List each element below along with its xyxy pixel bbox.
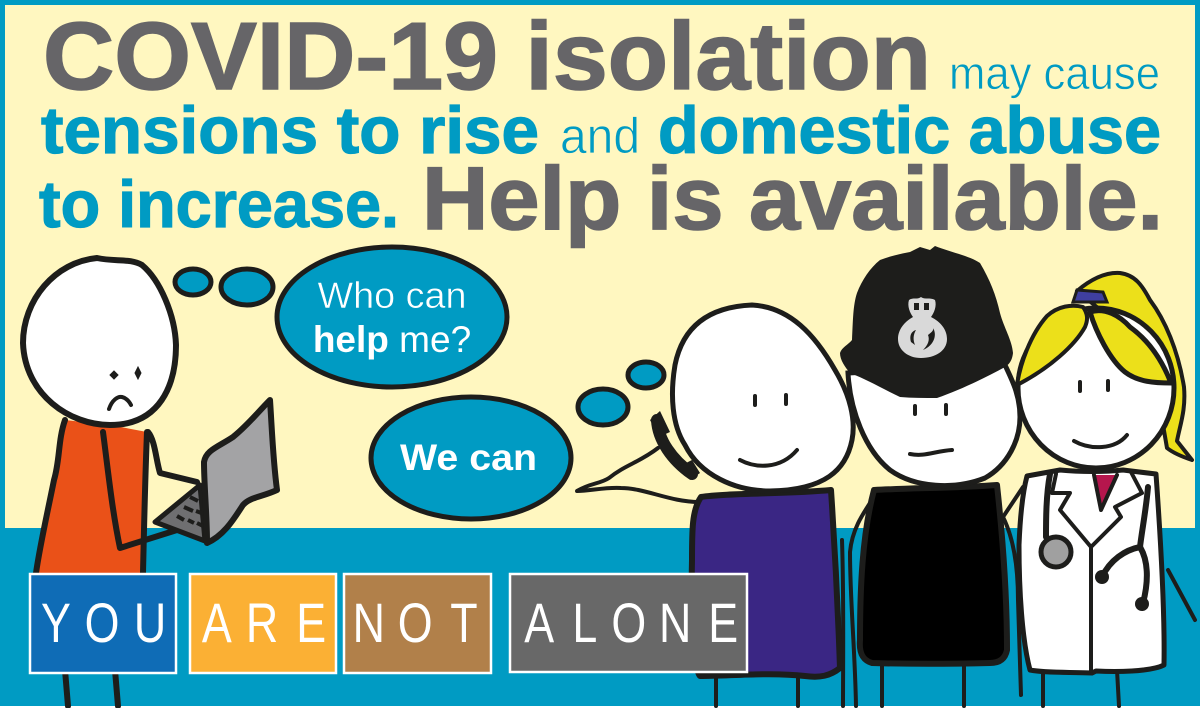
title: headline text: to increase.	[39, 167, 399, 241]
title: headline text	[39, 3, 1163, 248]
laptop keyboard	[155, 485, 205, 541]
lapels	[1052, 472, 1142, 671]
orange top	[35, 420, 147, 575]
word box: YOU	[30, 574, 176, 673]
stethoscope	[1046, 474, 1148, 603]
helmet	[840, 246, 1013, 398]
thought bubble: who can help me	[175, 247, 507, 387]
thought bubble: who can help me: Who can	[318, 275, 466, 316]
ponytail	[1077, 273, 1192, 460]
word box: ALONE: ALONE	[524, 591, 738, 654]
word box: ALONE	[510, 574, 747, 672]
head	[672, 305, 853, 491]
title: headline text: tensions to rise	[41, 93, 539, 167]
title: headline text: may cause	[949, 47, 1160, 99]
figure: worried person with laptop	[23, 258, 277, 706]
figure: doctor	[1003, 273, 1195, 706]
outstretched arm	[577, 448, 699, 502]
title: headline text: COVID-19 isolation	[43, 3, 931, 110]
smiling face	[740, 395, 797, 466]
head	[23, 258, 176, 425]
black uniform	[860, 485, 1007, 664]
figure: police officer	[840, 246, 1021, 706]
head	[848, 365, 1020, 486]
title: headline text: and	[560, 108, 640, 164]
word box: ARE	[190, 574, 336, 673]
sad face	[110, 367, 141, 379]
laptop screen	[204, 400, 277, 543]
title: headline text: domestic abuse	[658, 93, 1161, 167]
telephone handset	[657, 420, 692, 474]
smiling face	[1074, 381, 1127, 447]
word box: YOU: YOU	[41, 591, 166, 654]
body outline and arms	[36, 420, 197, 573]
head	[1018, 308, 1174, 468]
legs and arms	[1003, 487, 1195, 706]
word box: NOT: NOT	[353, 591, 478, 654]
thought bubble: we can	[371, 362, 664, 519]
purple top	[692, 490, 840, 677]
hair fringe	[1017, 306, 1087, 385]
white coat	[1019, 470, 1164, 673]
legs	[65, 670, 118, 706]
helmet badge	[898, 297, 947, 358]
legs	[716, 675, 798, 706]
word box: ARE: ARE	[202, 591, 326, 654]
hair tie	[1073, 290, 1107, 302]
word box: NOT	[344, 574, 491, 673]
figure: helper on phone in purple	[577, 305, 853, 706]
thought bubble: who can help me: help me?	[313, 319, 471, 360]
serious face	[910, 405, 952, 455]
title: headline text: Help is available.	[422, 148, 1163, 248]
thought bubble: we can: We can	[400, 437, 537, 478]
red shirt	[1093, 475, 1117, 507]
arms and legs	[842, 500, 1021, 706]
